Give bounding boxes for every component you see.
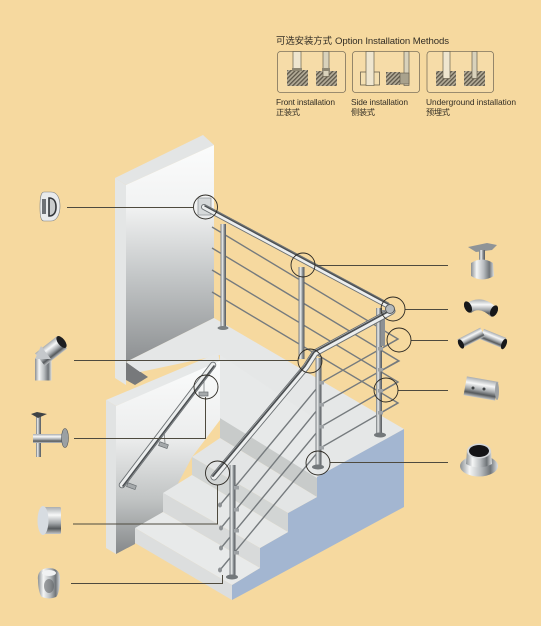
labels: front installation: Front installation — [276, 97, 335, 107]
heading: installation methods: Option Installation Methods — [335, 36, 449, 47]
step 2 — [163, 475, 288, 568]
icon: dome cap — [38, 568, 60, 598]
labels: underground installation — [426, 97, 516, 117]
icon: curved elbow — [462, 299, 500, 318]
upper step riser — [220, 418, 317, 497]
leader lines — [67, 208, 448, 584]
icon: base flange — [460, 444, 498, 476]
lower wall — [106, 353, 220, 554]
labels: underground installation: Underground installation — [426, 97, 516, 107]
labels: front installation: 正装式 — [276, 107, 300, 117]
icon: swivel tee — [457, 328, 508, 350]
heading: installation methods: 可选安装方式 — [276, 35, 333, 46]
panel: side installation — [352, 52, 420, 92]
staircase illustration — [106, 135, 404, 600]
upper wall — [115, 135, 214, 385]
heading: installation methods — [276, 35, 449, 47]
labels: front installation — [276, 97, 335, 117]
panel: front installation — [278, 52, 346, 92]
main handrail — [204, 206, 394, 477]
labels: underground installation: 预埋式 — [426, 107, 450, 117]
wall handrail with brackets — [122, 365, 214, 490]
stairs: blue side face — [232, 429, 404, 600]
icon: wall bracket — [31, 412, 68, 457]
wall plate — [198, 198, 211, 215]
panel: underground installation — [427, 52, 494, 92]
icon: end cap — [38, 506, 61, 535]
icon: saddle support — [468, 243, 497, 280]
icon: wall flange — [40, 192, 60, 221]
posts — [218, 224, 386, 580]
labels: side installation: Side installation — [351, 97, 408, 107]
labels: side installation — [351, 97, 408, 117]
labels: side installation: 侧装式 — [351, 107, 375, 117]
landing floor — [126, 318, 404, 477]
step 3 — [192, 438, 317, 532]
cables — [212, 227, 399, 570]
icon: angled elbow — [35, 334, 69, 380]
step 1 — [135, 512, 260, 600]
detail circles — [194, 195, 411, 485]
icon: cross bar holder — [464, 376, 499, 401]
